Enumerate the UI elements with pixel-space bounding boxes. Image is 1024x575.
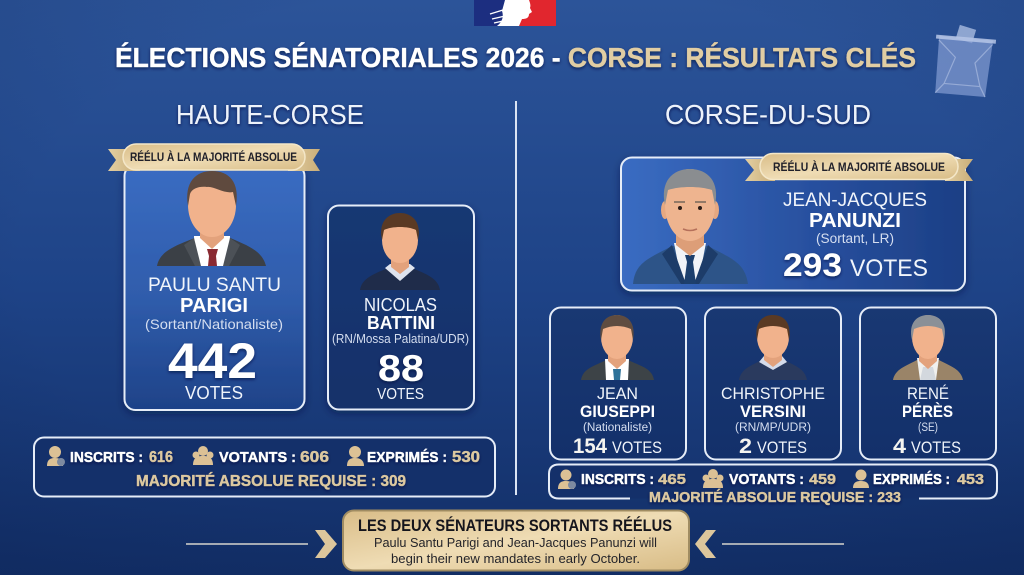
panel: stats Corse-du-Sud: 465 — [658, 471, 686, 488]
panel: stats Corse-du-Sud: 453 — [957, 471, 984, 488]
panel: stats Corse-du-Sud: VOTANTS : — [729, 472, 804, 488]
panel: stats Haute-Corse: INSCRITS : — [70, 449, 143, 466]
panel: Christophe Versini: (RN/MP/UDR) — [735, 422, 811, 434]
panel: Paulu Santu Parigi: (Sortant/Nationaliste) — [145, 316, 283, 332]
vote count: 293 — [783, 247, 842, 283]
portrait: Battini — [360, 213, 440, 290]
portrait: Panunzi — [633, 169, 748, 284]
icon: inscrits — [558, 470, 576, 489]
icon: exprimés — [347, 446, 364, 466]
panel: René Pérès — [860, 308, 996, 460]
panel: Jean-Jacques Panunzi: (Sortant, LR) — [816, 231, 894, 246]
panel: Jean-Jacques Panunzi — [621, 158, 965, 290]
callout: both incumbents re-elected — [343, 510, 689, 570]
icon: votants — [702, 469, 724, 488]
vote count: 4 — [893, 435, 906, 458]
panel: stats Corse-du-Sud: EXPRIMÉS : — [873, 471, 950, 488]
panel: Jean Giuseppi: GIUSEPPI — [580, 402, 655, 421]
panel: Jean Giuseppi — [550, 308, 686, 460]
panel: stats Haute-Corse: EXPRIMÉS : — [367, 449, 447, 466]
icon: ballot box — [931, 23, 997, 98]
badge: réélu Panunzi — [745, 154, 973, 181]
badge: réélu Panunzi: RÉÉLU À LA MAJORITÉ ABSOLUE — [773, 161, 945, 174]
panel: stats Corse-du-Sud: INSCRITS : — [581, 472, 654, 488]
panel: Paulu Santu Parigi: PARIGI — [180, 295, 248, 317]
panel: Nicolas Battini: (RN/Mossa Palatina/UDR) — [332, 332, 469, 346]
portrait: Pérès — [893, 315, 963, 380]
panel: Christophe Versini: VERSINI — [740, 402, 806, 421]
icon: inscrits — [47, 446, 65, 466]
callout: both incumbents re-elected: Paulu Santu Parigi and Jean-Jacques Panunzi will — [374, 535, 657, 550]
arrow: right line and chevron — [695, 530, 844, 558]
title: ÉLECTIONS SÉNATORIALES 2026 - CORSE : RÉSULTATS CLÉS — [115, 42, 916, 73]
candidate name: JEAN — [597, 384, 638, 403]
icon: votants — [192, 446, 214, 465]
candidate name: CHRISTOPHE — [721, 384, 825, 403]
vote count: 442 — [168, 333, 257, 389]
panel: Christophe Versini: VOTES — [757, 439, 807, 457]
portrait: Versini — [739, 315, 807, 380]
portrait: Parigi — [157, 171, 266, 266]
vote count: 88 — [378, 348, 424, 389]
callout: both incumbents re-elected: begin their new mandates in early October. — [391, 551, 640, 566]
panel: Nicolas Battini — [328, 206, 474, 410]
candidate name: JEAN-JACQUES — [783, 190, 927, 211]
required majority: MAJORITÉ ABSOLUE REQUISE : 233 — [649, 489, 901, 506]
candidate name: PAULU SANTU — [148, 275, 281, 296]
arrow: left line and chevron — [186, 530, 337, 558]
portrait: Giuseppi — [581, 315, 654, 380]
panel: René Pérès: (SE) — [918, 422, 938, 434]
panel: René Pérès: VOTES — [911, 439, 961, 457]
icon: exprimés — [853, 470, 869, 488]
panel: Nicolas Battini: BATTINI — [367, 313, 435, 333]
panel: Jean Giuseppi: VOTES — [612, 439, 662, 457]
heading: Corse-du-Sud: CORSE-DU-SUD — [665, 99, 871, 130]
heading: Haute-Corse: HAUTE-CORSE — [176, 99, 364, 130]
panel: Paulu Santu Parigi — [124, 165, 304, 410]
panel: René Pérès: PÉRÈS — [902, 402, 953, 421]
panel: Christophe Versini — [705, 308, 841, 460]
panel: Jean Giuseppi: (Nationaliste) — [583, 422, 652, 434]
panel: stats Haute-Corse — [34, 438, 495, 496]
panel: Nicolas Battini: VOTES — [377, 386, 424, 403]
badge: réélu Parigi — [108, 144, 320, 171]
panel: stats Haute-Corse: 606 — [300, 449, 329, 466]
panel: stats Haute-Corse: 530 — [452, 449, 480, 466]
callout: both incumbents re-elected: LES DEUX SÉNATEURS SORTANTS RÉÉLUS — [358, 516, 672, 535]
panel: Jean-Jacques Panunzi: VOTES — [850, 255, 928, 282]
badge: réélu Parigi: RÉÉLU À LA MAJORITÉ ABSOLUE — [130, 151, 297, 164]
panel: stats Corse-du-Sud: 459 — [809, 471, 836, 488]
candidate name: RENÉ — [907, 384, 949, 403]
candidate name: NICOLAS — [364, 295, 437, 315]
panel: stats Haute-Corse: VOTANTS : — [219, 449, 296, 466]
panel: Paulu Santu Parigi: VOTES — [185, 382, 243, 403]
vote count: 154 — [573, 435, 607, 458]
panel: Jean-Jacques Panunzi: PANUNZI — [809, 210, 901, 232]
required majority: MAJORITÉ ABSOLUE REQUISE : 309 — [136, 473, 406, 490]
panel: stats Corse-du-Sud — [549, 464, 997, 506]
panel: stats Haute-Corse: 616 — [149, 449, 173, 466]
icon: French Republic flag logo — [474, 0, 556, 26]
vote count: 2 — [739, 435, 752, 458]
